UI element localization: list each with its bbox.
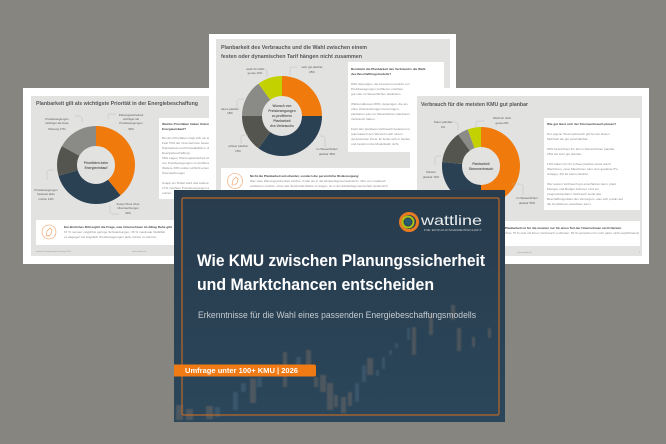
text box: top slide: automatisch den Wunsch nach einem — [351, 132, 403, 136]
text box: left slide: Fast 70% der Unternehmen bewerten — [162, 141, 214, 145]
donut labels: priorities: nutzen 14% — [38, 197, 54, 201]
text box: left slide: von Preisbewegungen zu profitieren. — [162, 161, 212, 165]
callout: top slide: Nicht die Planbarkeit entscheidet, sondern die persönliche Risikoneigung: — [250, 174, 359, 178]
heading: top slide: festen oder dynamischen Tarif hängen nicht zusammen — [221, 54, 362, 60]
callout: right slide — [421, 221, 640, 246]
text box: top slide — [348, 62, 444, 152]
donut labels: priorities: Preisbewegungen — [34, 188, 58, 192]
footer: left slide: wattline | Energieeinkauf Umfrage 2026 — [36, 250, 72, 253]
text box: top slide: Preisbewegungen profitieren möchten, — [351, 87, 404, 91]
title: und Marktchancen entscheiden — [197, 276, 434, 294]
donut labels: electricity consumption: 4% — [441, 125, 446, 129]
donut labels: predictability: planbar 35% — [319, 152, 336, 156]
donut centre label: predictability: Planbarkeit — [273, 119, 292, 123]
text box: left slide — [159, 118, 220, 199]
donut labels: priorities: Preisbewegungen — [119, 121, 143, 125]
text box: right slide: 13% halten ihn für schwer planbar (etwa durch — [547, 162, 611, 166]
text box: right slide: Mehrheit als gut einschätzbar: — [547, 137, 588, 141]
donut labels: electricity consumption: Schwer — [426, 170, 436, 174]
banner: survey — [174, 364, 316, 376]
donut labels: priorities: wichtiger als feste — [46, 121, 69, 125]
text box: left slide: Bei den Prioritäten zeigt sich ein klares — [162, 136, 216, 140]
donut labels: predictability — [221, 65, 338, 156]
callout: left slide: Ein ähnliches Bild ergibt die Frage, was Unternehmen im Alltag Ruhe gibt — [64, 225, 172, 229]
panel: top slide, consumption and tariff — [209, 34, 456, 190]
callout: right slide: Über 75 % sind mit ihrem Verbrauch verbinden, 50 % wünschen ihn sich (aber nicht verpflichtend) — [505, 231, 639, 235]
donut labels: priorities: Fester Preis ohne — [117, 202, 140, 206]
donut labels: electricity consumption: planbar 13% — [423, 175, 440, 179]
text box: right slide: 25% als sehr gut planbar. — [547, 152, 582, 156]
icon: hand — [228, 174, 242, 188]
text box: right slide: prognostizierbarer Verbrauch senkt das — [547, 192, 601, 196]
heading: left slide: Planbarkeit gilt als wichtigste Priorität in der Energiebeschaffung — [36, 101, 198, 107]
donut labels: priorities: wichtiger als — [123, 117, 140, 121]
text box: left slide: Energiebeschaffung. — [162, 151, 190, 155]
footer: right slide: 1 — [639, 252, 641, 254]
footer: right slide: www.wattline.de — [517, 251, 532, 254]
text box: left slide: 17% möchten Preisbewegungen aktiv — [162, 186, 214, 190]
heading: top slide — [221, 45, 367, 60]
text box: left slide: Knapp ein Drittel sieht das anders: — [162, 181, 209, 185]
donut centre label: electricity consumption: Planbarkeit — [472, 162, 491, 166]
text box: left slide: Energieeinkauf? — [162, 127, 186, 131]
donut labels: predictability: 18% — [227, 111, 233, 115]
icon: hand — [42, 225, 56, 239]
footer: right slide — [517, 251, 641, 254]
text box: top slide: gut oder im Wesentlichen planbaren — [351, 92, 401, 96]
callout: top slide: Wer viele Planungssicherheit möchte, findet sie in der Einkaufsgemeinschaft fix. Wer von marktnah — [250, 179, 386, 183]
donut labels: electricity consumption: genau 8% — [495, 121, 509, 125]
text box: left slide: 36% sagen, Planungssicherheit ist wichtig — [162, 156, 220, 160]
donut labels: predictability: sehr gut planbar — [302, 65, 322, 69]
text box: left slide: Welche Prioritäten haben Unternehmen — [162, 122, 220, 126]
panel: left slide, priorities — [23, 88, 220, 264]
text box: left slide: Überraschungen — [162, 171, 185, 175]
text box: top slide: Verbrauch haben. — [351, 117, 376, 121]
donut labels: priorities: 33% — [125, 211, 131, 215]
donut labels: priorities: Planungssicherheit — [119, 113, 143, 117]
text box: right slide: die Konditionen auswirken kann. — [547, 202, 592, 206]
text box: top slide: dynamischen Preis. Er findet sich in beiden — [351, 137, 410, 141]
callout: left slide: es dagegen bei ängstlich Preisbewegungen aktiv nutzen zu können. — [64, 235, 157, 239]
logo: wattline: DIE EINKAUFSGEMEINSCHAFT — [424, 228, 482, 232]
donut chart: priorities — [67, 136, 125, 194]
banner: survey: Umfrage unter 100+ KMU | 2026 — [185, 366, 298, 375]
text box: right slide: Der eigene Stromverbrauch gilt bei der klaren — [547, 132, 610, 136]
text box: top slide: ohne Überraschungen bevorzugen, — [351, 107, 400, 111]
callout: left slide — [36, 220, 213, 245]
donut labels: priorities: 36% — [128, 127, 134, 131]
donut labels: predictability: schwer planbar — [228, 144, 248, 148]
text box: top slide: planbaren oder im Wesentlichen planbaren — [351, 112, 410, 116]
text box: left slide: Planbarkeit und Preisstabilität in der — [162, 146, 211, 150]
donut labels: predictability: Im Wesentlichen — [316, 147, 338, 151]
title: Wie KMU zwischen Planungssicherheit — [197, 252, 485, 270]
text box: left slide: nutzen — [162, 191, 172, 195]
panel: cover card — [174, 190, 505, 422]
donut labels: priorities: Planung 17% — [48, 127, 66, 131]
donut centre label: predictability: zu profitieren — [272, 114, 292, 118]
panel: right slide, electricity consumption — [410, 88, 649, 264]
text box: left slide: Weitere 33% wollen schlicht einen festen — [162, 166, 218, 170]
donut labels: predictability: kaum planbar — [221, 107, 239, 111]
donut centre label: priorities: Prioritäten beim — [84, 161, 108, 165]
donut centre label: predictability: des Verbrauchs — [270, 124, 294, 128]
text box: top slide: Fazit: Ein planbarer Verbrauch bedeutet nicht — [351, 127, 413, 131]
text box: right slide: Anlage), 4% für kaum planbar. — [547, 172, 589, 176]
donut centre label: predictability: Preisbewegungen — [268, 109, 296, 113]
text box: right slide: Beschaffungsrisiko des Versorgers, was sich positiv auf — [547, 197, 623, 201]
text box: right slide: Wer seinen Verbrauch gut einschätzen kann, plant — [547, 182, 616, 186]
donut labels: predictability: genau 10% — [248, 71, 263, 75]
text box: top slide: 60% derjenigen, die bewusst und aktiv von — [351, 82, 410, 86]
logo: wattline — [400, 212, 482, 232]
text box: right slide: Wachstum, neue Maschinen oder eine geplante PV- — [547, 167, 618, 171]
callout: right slide: Planbarkeit ist für die meisten nur für einen Teil der Unternehmen ein Kriterium. — [505, 226, 622, 230]
donut centre label: priorities: Energieeinkauf — [85, 166, 108, 170]
heading: top slide: Planbarkeit des Verbrauchs und die Wahl zwischen einem — [221, 45, 367, 51]
callout: left slide: 67 % nennen möglichst geringe Schwankungen, 36 % maximale Stabilität — [64, 230, 165, 234]
callout: top slide — [221, 168, 450, 190]
callout: top slide: profitieren möchte, ohne das Spotmarkt-Risiko zu tragen, ist in der Einkaufsgemeinschaft dynamisch — [250, 184, 388, 188]
orange frame — [182, 198, 499, 415]
donut labels: electricity consumption — [423, 116, 538, 205]
candlestick chart background — [176, 305, 491, 420]
footer: left slide — [36, 250, 147, 253]
donut centre label: electricity consumption: Stromverbrauch — [469, 167, 493, 171]
footer: left slide: www.wattline.de — [132, 250, 147, 253]
donut labels: electricity consumption: Kaum planbar — [434, 120, 452, 124]
donut centre label: predictability — [268, 104, 296, 128]
logo: wattline: wattline — [420, 212, 482, 228]
donut centre label: electricity consumption — [469, 162, 493, 171]
donut chart: electricity consumption — [452, 137, 510, 195]
donut labels: electricity consumption: planbar 50% — [519, 201, 536, 205]
text box: top slide: Bestimmt die Planbarkeit des Verbrauchs die Wahl — [351, 67, 425, 71]
text box: right slide: Mengen und Budget sicherer. Und ein — [547, 187, 599, 191]
donut labels: predictability: 16% — [235, 149, 241, 153]
text box: right slide: Wie gut lässt sich der Stromverbrauch planen? — [547, 122, 616, 126]
donut labels: predictability: weiß ich nicht — [246, 67, 264, 71]
donut centre label: priorities — [84, 161, 108, 170]
donut chart: predictability — [252, 86, 312, 146]
donut labels: electricity consumption: Weiß ich nicht — [493, 116, 511, 120]
text box: top slide: des Beschaffungsmodells? — [351, 72, 391, 76]
donut labels: priorities: bewusst aktiv — [37, 192, 55, 196]
donut labels: priorities: Preisbewegungen — [45, 117, 69, 121]
donut labels: priorities — [34, 113, 143, 215]
text box: top slide: und bestimmt die Modellwahl nicht. — [351, 142, 399, 146]
icon: logo ring — [400, 214, 418, 230]
text box: top slide: Währenddessen 86%, derjenigen, die am — [351, 102, 408, 106]
text box: right slide: 50% bezeichnen ihn als im Wesentlichen planbar, — [547, 147, 615, 151]
text box: right slide — [544, 118, 640, 210]
donut labels: priorities: Überraschungen — [117, 206, 139, 210]
subtitle: Erkenntnisse für die Wahl eines passenden Energiebeschaffungsmodells — [198, 310, 476, 321]
donut centre label: predictability: Wunsch von — [273, 104, 291, 108]
title — [197, 252, 485, 294]
heading: right slide: Verbrauch für die meisten KMU gut planbar — [421, 102, 528, 108]
donut labels: electricity consumption: Im Wesentlichen — [516, 196, 538, 200]
donut labels: predictability: 25% — [309, 70, 315, 74]
